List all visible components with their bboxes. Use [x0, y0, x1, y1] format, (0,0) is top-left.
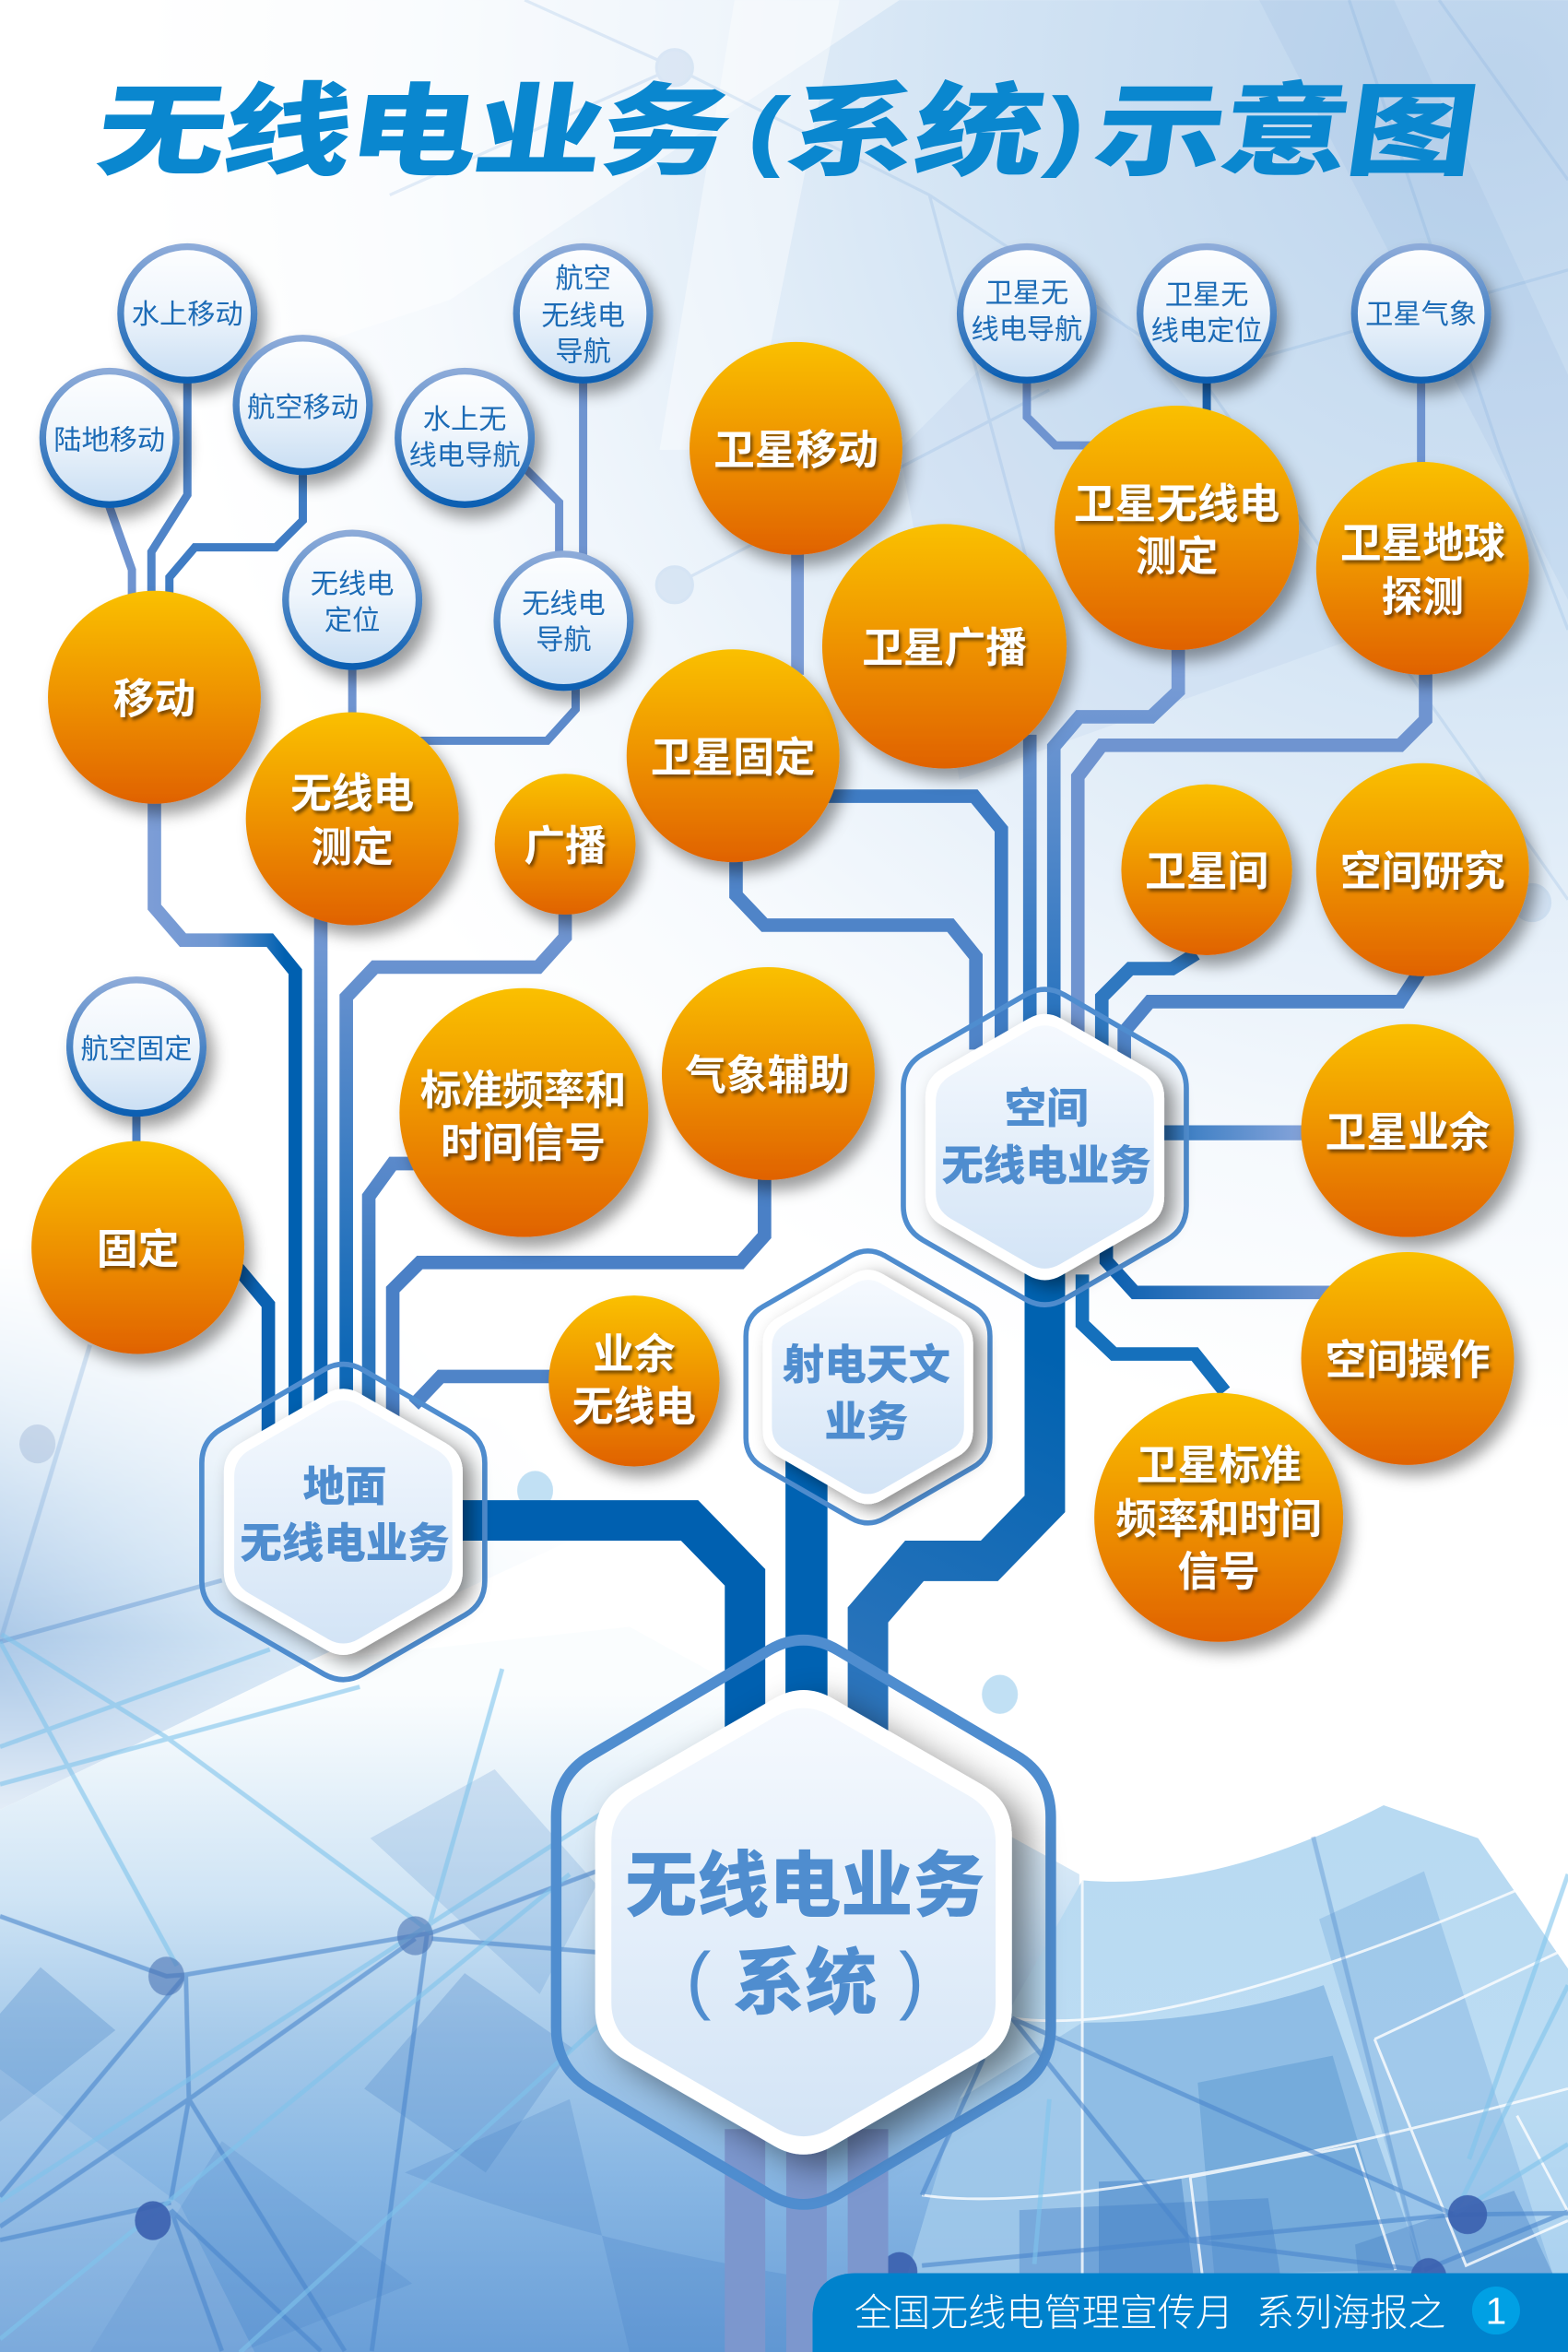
connector lines [108, 375, 1426, 2352]
small circle connector lines [108, 375, 1421, 1152]
small circle: 无线电导航: 导航 [536, 624, 592, 656]
orange circle: 卫星固定: 卫星固定 [651, 736, 816, 781]
hexagon: radio services (system): ( [686, 1937, 711, 2021]
orange circle: 业余无线电 [548, 1295, 720, 1466]
hexagon: space radio services: 空间 [1005, 1085, 1089, 1132]
small circle: 卫星气象: 卫星气象 [1365, 299, 1477, 330]
small circle: 航空移动 [236, 338, 370, 472]
orange circle: 气象辅助 [662, 967, 875, 1180]
space service lines [736, 644, 1426, 1391]
orange circle: 标准频率和时间信号: 时间信号 [441, 1121, 606, 1166]
small circle: 卫星无线电定位 [1140, 247, 1273, 380]
orange circle: 卫星间: 卫星间 [1145, 850, 1268, 895]
orange circle: 标准频率和时间信号: 标准频率和 [420, 1069, 626, 1114]
title: 系统 [781, 76, 1050, 188]
orange circle: 卫星固定 [627, 649, 840, 862]
footer banner: 全国无线电管理宣传月 [855, 2291, 1233, 2334]
trunks to main hexagon [450, 1259, 1044, 2352]
orange circle: 空间操作: 空间操作 [1326, 1339, 1490, 1384]
small circle: 航空固定 [70, 980, 203, 1114]
orange circle: 固定: 固定 [97, 1227, 179, 1272]
small circle: 卫星无线电导航: 卫星无 [985, 278, 1068, 309]
orange circle: 业余无线电: 业余 [593, 1332, 676, 1377]
orange circle: 卫星广播: 卫星广播 [862, 626, 1027, 671]
orange circle: 卫星间 [1121, 785, 1292, 955]
orange circle: 业余无线电: 无线电 [572, 1385, 696, 1430]
orange circle: 气象辅助: 气象辅助 [685, 1054, 850, 1099]
small circle: 无线电导航 [497, 554, 631, 688]
small circle: 水上无线电导航: 线电导航 [409, 440, 521, 471]
small circle: 航空无线电导航: 无线电 [541, 301, 625, 332]
orange circle: 卫星标准频率和时间信号: 信号 [1177, 1550, 1260, 1595]
orange circle: 无线电测定 [246, 713, 459, 925]
orange circle: 无线电测定: 无线电 [290, 772, 414, 817]
hexagon: radio astronomy: 业务 [824, 1399, 908, 1446]
hexagon: space radio services: 无线电业务 [941, 1142, 1151, 1189]
terrestrial service lines [154, 795, 764, 1439]
orange circle: 卫星业余: 卫星业余 [1326, 1110, 1491, 1155]
title: 示意图 [1089, 76, 1482, 188]
title: ( [742, 78, 794, 179]
orange circle: 卫星移动 [690, 342, 902, 555]
hexagon: terrestrial radio services: 无线电业务 [240, 1520, 450, 1567]
hexagon: radio services (system): 无线电业务 [625, 1845, 984, 1926]
orange circle: 卫星无线电测定 [1055, 406, 1299, 650]
orange circle: 移动: 移动 [113, 677, 195, 722]
orange circle: 卫星地球探测: 探测 [1382, 575, 1464, 621]
orange circle: 卫星标准频率和时间信号: 频率和时间 [1115, 1497, 1322, 1542]
small circle: 航空固定: 航空固定 [81, 1034, 192, 1065]
small circle: 卫星气象 [1354, 247, 1488, 380]
small circle: 水上无线电导航: 水上无 [423, 404, 506, 435]
orange circle: 广播: 广播 [524, 824, 607, 869]
small circle: 卫星无线电定位: 卫星无 [1165, 280, 1248, 311]
title: ) [1040, 78, 1089, 179]
small circle: 陆地移动 [42, 372, 176, 504]
footer banner: 系列海报之 [1256, 2291, 1445, 2334]
orange circle: 空间操作 [1302, 1252, 1514, 1465]
hexagon: radio services (system): 系统 [733, 1943, 877, 2024]
small circle: 卫星无线电导航: 线电导航 [971, 313, 1082, 345]
orange circle: 广播 [495, 774, 636, 915]
orange circle: 卫星业余 [1302, 1024, 1514, 1237]
small circle: 无线电定位 [286, 533, 419, 667]
orange circle: 卫星广播 [822, 524, 1067, 769]
small circle: 水上无线电导航 [398, 372, 531, 504]
small circle: 无线电定位: 定位 [324, 605, 380, 636]
small circle: 无线电导航: 无线电 [522, 588, 606, 620]
title: 无线电业务 [90, 76, 737, 188]
small circle: 无线电定位: 无线电 [311, 569, 395, 600]
orange circle: 空间研究 [1316, 763, 1529, 976]
hexagon: radio astronomy: 射电天文 [783, 1341, 950, 1389]
hexagon: radio astronomy [746, 1251, 990, 1523]
hexagon: radio services (system): ) [899, 1937, 924, 2021]
orange circle: 卫星移动: 卫星移动 [713, 429, 878, 474]
hexagon: radio services (system) [556, 1640, 1051, 2204]
small circle: 陆地移动: 陆地移动 [53, 425, 165, 456]
orange circle: 空间研究: 空间研究 [1340, 850, 1505, 895]
orange circle: 卫星地球探测: 卫星地球 [1340, 521, 1505, 566]
footer banner: 1 [1486, 2290, 1506, 2333]
small circle: 航空移动: 航空移动 [247, 392, 359, 423]
orange circle: 无线电测定: 测定 [311, 825, 394, 870]
hexagon: terrestrial radio services [202, 1365, 485, 1680]
orange circle: 卫星地球探测 [1316, 462, 1529, 675]
small circle: 航空无线电导航: 航空 [555, 263, 611, 294]
orange circle: 卫星无线电测定: 卫星无线电 [1074, 482, 1279, 527]
orange circle: 标准频率和时间信号 [399, 988, 648, 1237]
small circle: 水上移动: 水上移动 [132, 299, 243, 330]
footer banner [812, 2273, 1568, 2352]
orange circle: 卫星标准频率和时间信号: 卫星标准 [1137, 1443, 1302, 1488]
small circle: 水上移动 [121, 247, 254, 380]
orange circle: 固定 [31, 1141, 244, 1354]
orange circle: 移动 [48, 591, 261, 804]
hexagon: terrestrial radio services: 地面 [303, 1463, 387, 1510]
orange circle: 卫星无线电测定: 测定 [1136, 535, 1218, 580]
hexagon: space radio services [903, 989, 1186, 1305]
small circle: 卫星无线电定位: 线电定位 [1151, 315, 1263, 347]
small circle: 航空无线电导航: 导航 [555, 337, 611, 368]
orange circle: 卫星标准频率和时间信号 [1094, 1393, 1343, 1642]
small circle: 航空无线电导航 [516, 247, 650, 380]
small circle: 卫星无线电导航 [961, 247, 1093, 380]
